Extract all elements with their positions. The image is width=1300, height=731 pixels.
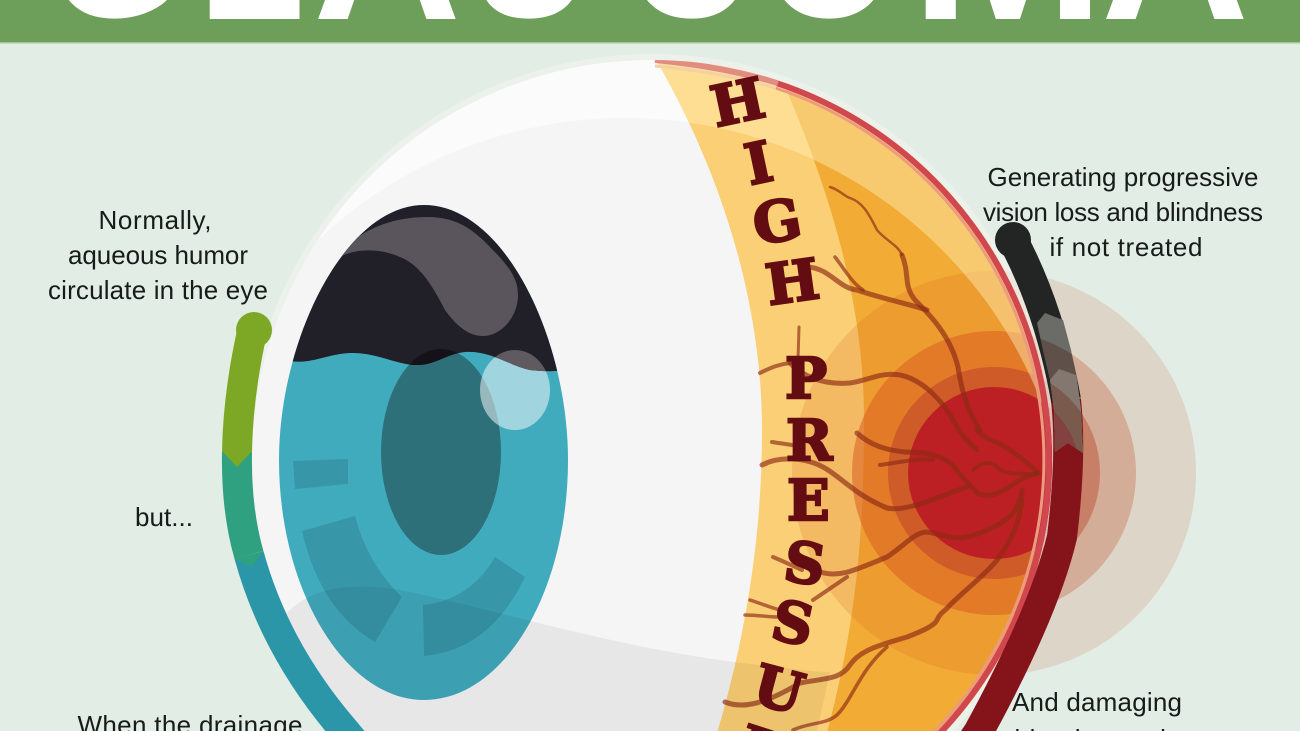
label: vision loss: Generating progressive xyxy=(988,162,1258,192)
dark upper iris xyxy=(292,205,558,372)
iris xyxy=(279,205,568,700)
dark pupil top xyxy=(410,349,458,365)
iris segments xyxy=(293,459,525,656)
label: normally: aqueous humor xyxy=(68,240,248,270)
label: normally: Normally, xyxy=(98,205,212,235)
label: vision loss: vision loss and blindness xyxy=(983,197,1263,227)
rim of the cut section xyxy=(655,60,1049,731)
pressure rings inside the eye xyxy=(792,271,1052,674)
label: normally: circulate in the eye xyxy=(48,275,268,305)
reflection on dark area xyxy=(338,217,518,336)
sclera xyxy=(252,118,762,731)
sclera bottom shadow xyxy=(286,598,830,731)
label: damaging blood vessels xyxy=(1012,687,1182,731)
sclera light reflection xyxy=(178,40,1100,731)
pupil xyxy=(381,349,501,555)
glint on the water xyxy=(480,350,550,430)
header banner xyxy=(0,0,1300,69)
label: vision loss xyxy=(983,162,1263,262)
label: normally xyxy=(48,205,268,305)
retinal blood vessels xyxy=(725,187,1038,730)
eyeball xyxy=(252,54,1054,731)
cut section: outer yellow layer xyxy=(656,60,1048,731)
label: but: but... xyxy=(135,502,193,532)
label: damaging blood vessels: And damaging xyxy=(1012,687,1182,717)
right process arc xyxy=(961,222,1084,731)
iris shadow xyxy=(306,586,530,700)
glint on the dark area xyxy=(495,350,546,372)
label: vision loss: if not treated xyxy=(1050,232,1202,262)
section light reflection xyxy=(658,64,1051,430)
pressure halo outside the eye xyxy=(792,271,1196,675)
left process arc xyxy=(222,312,360,731)
cut section: inner orange layer xyxy=(783,82,1052,731)
